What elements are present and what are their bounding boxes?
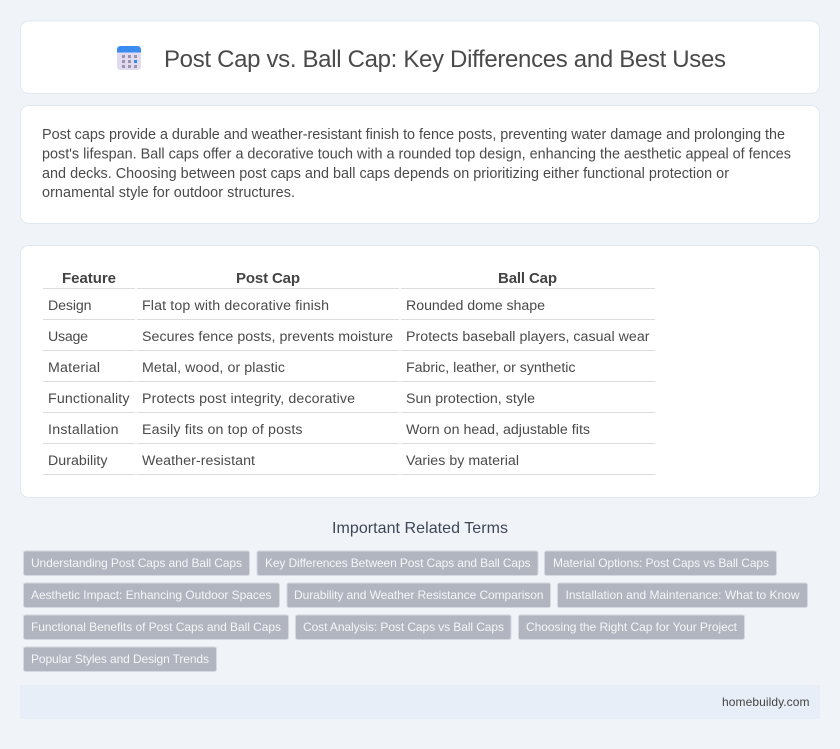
tag	[24, 551, 250, 576]
table row: installation: Worn on head, adjustable fits	[406, 422, 590, 438]
table row: functionality: Sun protection, style	[406, 391, 535, 407]
footer source text: homebuildy.com	[722, 695, 810, 709]
panel: comparison table	[20, 246, 820, 498]
tag: Durability and Weather Resistance Comparison	[294, 588, 544, 602]
table row: durability: Varies by material	[406, 453, 519, 469]
tag: Key Differences Between Post Caps and Ball Caps	[265, 556, 530, 570]
tag	[558, 583, 808, 608]
table row: usage: Protects baseball players, casual wear	[406, 329, 650, 345]
panel: header	[20, 21, 820, 94]
table row: material: Metal, wood, or plastic	[142, 360, 285, 376]
text block: introduction paragraph: ornamental style for outdoor structures.	[42, 185, 295, 201]
table row: durability: Durability	[48, 453, 108, 469]
table row: material: Material	[48, 360, 100, 376]
tag	[24, 615, 288, 640]
table row: functionality: Functionality	[48, 391, 130, 407]
table row: installation: Easily fits on top of posts	[142, 422, 302, 438]
panel: related term tags	[24, 551, 808, 672]
text block: introduction paragraph: post's lifespan. Ball caps offer a decorative touch with a rounded top design, enhancing the aesthetic appeal of fences	[42, 146, 791, 162]
icon: calendar	[117, 46, 141, 70]
tag	[518, 615, 744, 640]
footer	[20, 685, 820, 719]
tag: Cost Analysis: Post Caps vs Ball Caps	[303, 620, 504, 634]
table row: functionality: Protects post integrity, decorative	[142, 391, 355, 407]
table row: material	[48, 360, 576, 376]
table row: usage: Usage	[48, 329, 88, 345]
title: Post Cap vs. Ball Cap: Key Differences and Best Uses	[164, 46, 726, 73]
tag: Functional Benefits of Post Caps and Ball Caps	[31, 620, 281, 634]
table row: design	[48, 298, 545, 314]
tag: Aesthetic Impact: Enhancing Outdoor Spaces	[31, 588, 272, 602]
tag: Material Options: Post Caps vs Ball Caps	[553, 556, 769, 570]
table row: design: Rounded dome shape	[406, 298, 545, 314]
tag	[257, 551, 538, 576]
tag: Choosing the Right Cap for Your Project	[526, 620, 738, 634]
table header row	[62, 270, 557, 287]
table row: usage: Secures fence posts, prevents moisture	[142, 329, 393, 345]
tag: Understanding Post Caps and Ball Caps	[31, 556, 242, 570]
table row: material: Fabric, leather, or synthetic	[406, 360, 576, 376]
text block: introduction paragraph	[42, 127, 791, 201]
tag	[24, 647, 216, 672]
heading: important related terms: Important Related Terms	[332, 520, 508, 537]
table row: installation: Installation	[48, 422, 118, 438]
table row: design: Flat top with decorative finish	[142, 298, 329, 314]
panel: introduction	[20, 106, 820, 224]
table row: durability	[48, 453, 519, 469]
tag	[544, 551, 776, 576]
table header row: Feature	[62, 270, 116, 287]
text block: introduction paragraph: and decks. Choosing between post caps and ball caps depends on prioritizing either functional protection or	[42, 166, 729, 182]
tag: Installation and Maintenance: What to Know	[566, 588, 800, 602]
table row: functionality	[48, 391, 535, 407]
tag	[296, 615, 511, 640]
text block: introduction paragraph: Post caps provide a durable and weather-resistant finish to fence posts, preventing water damage and prolonging the	[42, 127, 785, 143]
table header row: Post Cap	[236, 270, 300, 287]
table header row: Ball Cap	[498, 270, 557, 287]
table row: durability: Weather-resistant	[142, 453, 255, 469]
table row: usage	[48, 329, 650, 345]
tag	[287, 583, 550, 608]
table row: installation	[48, 422, 590, 438]
table row: design: Design	[48, 298, 92, 314]
tag: Popular Styles and Design Trends	[31, 652, 209, 666]
tag	[24, 583, 280, 608]
